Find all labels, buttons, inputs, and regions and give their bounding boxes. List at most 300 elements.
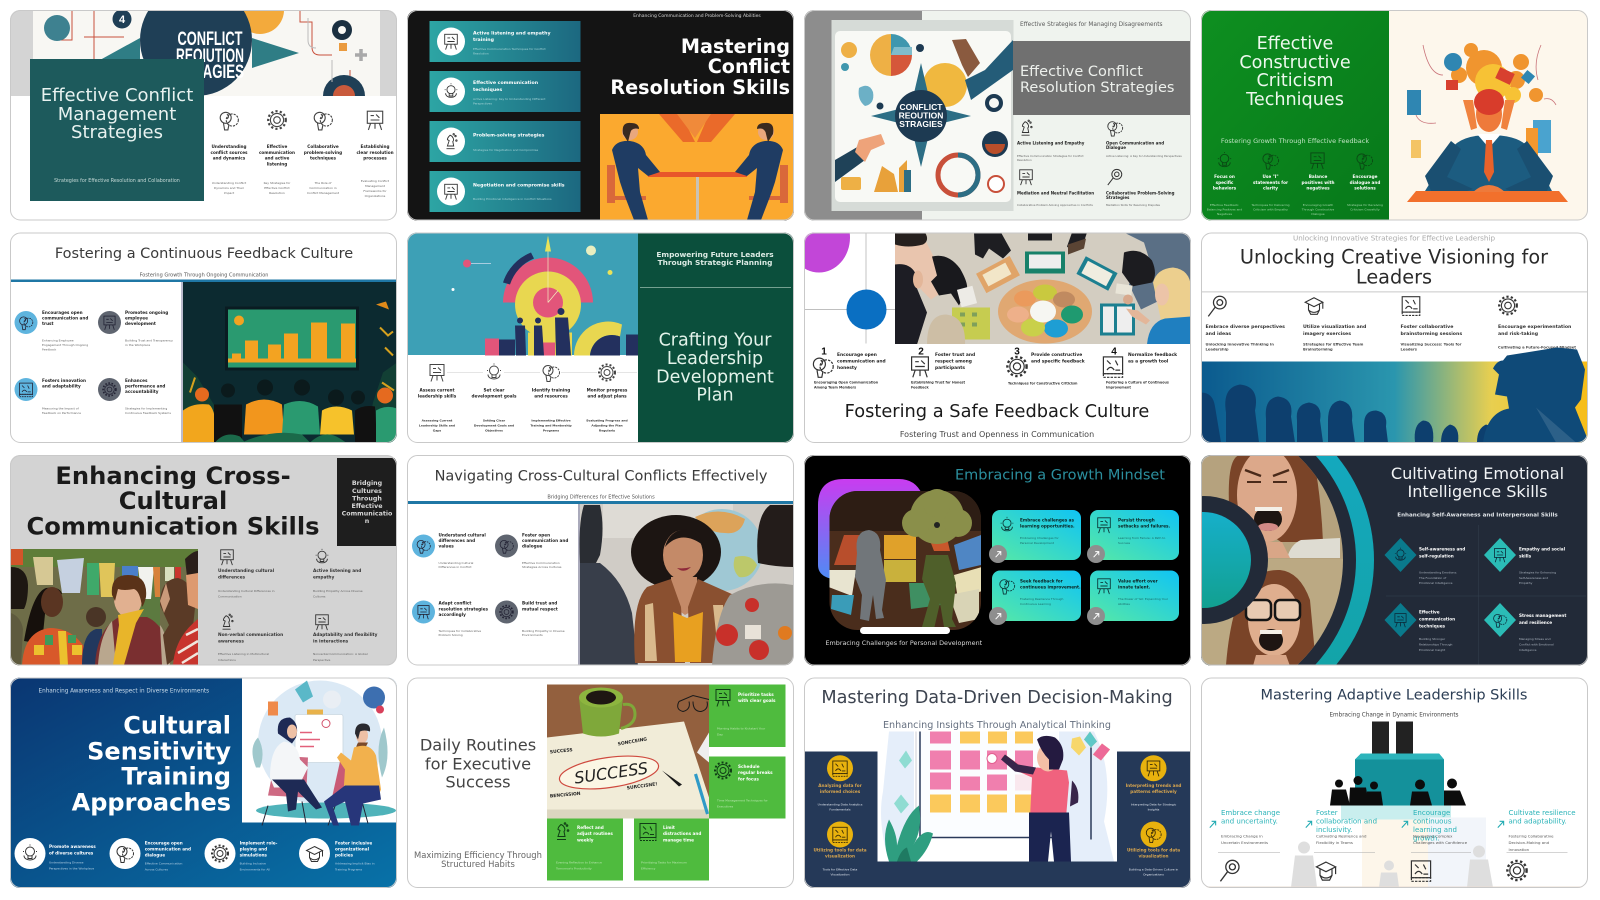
four approaches: Understand cultural — [438, 532, 486, 538]
panel: Fostering a Safe Feedback Culture — [804, 232, 1191, 443]
panel: Cultural Sensitivity Training Approaches: Approaches — [72, 788, 231, 816]
four leadership behaviours: and uncertainty. — [1221, 818, 1278, 826]
four skills with diamonds: Understanding Emotions: — [1419, 570, 1457, 574]
four skills with diamonds: Emotional Intelligence — [1419, 581, 1453, 585]
illustration: compass poster: STRAGIES — [899, 119, 943, 129]
four approaches: Building Empathy in Diverse — [522, 629, 565, 633]
panel: Effective Constructive Criticism Techniques — [1201, 10, 1588, 220]
four skills with diamonds: Managing Stress and — [1519, 637, 1551, 641]
four leadership behaviours: inclusivity. — [1316, 826, 1352, 834]
four development steps: Objectives — [485, 428, 503, 432]
illustration: audience watching bar chart — [181, 282, 397, 443]
panel: Cultural Sensitivity Training Approaches: Sensitivity — [87, 738, 231, 766]
four analytics items: visualization — [825, 854, 855, 858]
four analytics items: Visualization — [831, 872, 850, 876]
illustration: negotiation at a table — [600, 114, 794, 220]
four skills: Understanding cultural — [218, 568, 275, 574]
four approaches: playing and — [240, 846, 267, 852]
four techniques: negatives — [1306, 186, 1330, 190]
title panel: Effective Conflict — [41, 85, 193, 106]
photo: workshop from above — [895, 232, 1191, 344]
title panel: Development — [656, 368, 774, 388]
four analytics items: informed choices — [820, 789, 861, 794]
four techniques: Criticism with Empathy — [1253, 208, 1288, 212]
title: Cultivating Emotional — [1391, 464, 1564, 483]
four numbered items: 2 — [918, 346, 924, 358]
four skills with diamonds: Conflict with Emotional — [1519, 642, 1554, 646]
panel: Cultural Sensitivity Training Approaches — [10, 678, 397, 888]
four skills with diamonds: skills — [1519, 554, 1532, 558]
four teal skill panels — [430, 21, 580, 212]
four skills with diamonds: Empathy — [1519, 581, 1533, 585]
four skills with diamonds: Building Stronger — [1419, 637, 1446, 641]
illustration: conflict resolution poster — [10, 10, 397, 96]
four numbered items: 3 — [1014, 346, 1020, 358]
four skills: Interactions — [218, 658, 236, 662]
four numbered items: Foster trust and — [935, 352, 975, 358]
four techniques: Use "I" — [1262, 174, 1279, 179]
photo: success notebook and coffee: SUCCESS — [550, 747, 573, 755]
subtitle box: Bridging — [352, 480, 382, 487]
four benefits: Strategies for Implementing — [125, 406, 167, 410]
four practices: Brainstorming — [1303, 348, 1333, 352]
four strategies — [1017, 120, 1182, 207]
four benefits: and adaptability — [42, 384, 81, 388]
four approaches: resolution strategies — [438, 606, 488, 612]
four benefits — [14, 310, 173, 415]
four approaches: Techniques for Collaborative — [438, 629, 481, 633]
four strategies: Active Listening: A Key to Understanding Perspectives — [1106, 154, 1182, 158]
four gradient cards: learning opportunities. — [1020, 524, 1075, 528]
green routine tiles: Prioritizing Tasks for Maximum — [641, 860, 687, 864]
four approaches — [14, 838, 375, 872]
four skills with diamonds — [1384, 525, 1586, 665]
four benefits: Continuous Feedback Systems — [125, 411, 171, 415]
title: Conflict — [708, 55, 790, 78]
four approaches: mutual respect — [522, 606, 558, 612]
four approaches: communication and — [522, 538, 568, 543]
four teal skill panels: Building Emotional Intelligence in Conflict Situations — [473, 197, 552, 201]
illustration: conflict resolution poster: STRAGIES — [176, 62, 244, 83]
four practices: Leadership — [1206, 348, 1229, 352]
four benefits: development — [125, 321, 156, 326]
four skills: Communication — [218, 594, 242, 598]
four numbered items: Improvement — [1106, 386, 1131, 390]
four analytics items: Interpreting Data for Strategic — [1131, 802, 1177, 806]
four gradient cards: Learning from Failure: A Path to — [1118, 536, 1165, 540]
panel: Fostering a Safe Feedback Culture: Fostering Trust and Openness in Communication — [900, 430, 1094, 439]
illustration: two people with clipboard — [242, 678, 397, 826]
four numbered items: Provide constructive — [1031, 352, 1082, 358]
four benefits: accountability — [125, 389, 159, 394]
four strategy items: Collaborative — [307, 144, 339, 149]
title band — [1013, 41, 1191, 115]
panel: Daily Routines for Executive Success — [407, 678, 794, 888]
subtitle box: Communicatio — [342, 510, 393, 518]
four approaches: dialogue — [145, 852, 165, 858]
title panel: Leadership — [667, 349, 763, 369]
illustration: target with leaders — [407, 232, 638, 356]
four benefits: communication and — [42, 316, 88, 320]
four benefits: trust — [42, 321, 54, 326]
green routine tiles — [547, 684, 786, 880]
photo: young people at festival — [10, 549, 198, 666]
title: Mastering — [681, 35, 790, 58]
four development steps: Identify training — [532, 388, 570, 392]
four gradient cards: Success — [1118, 541, 1131, 545]
four approaches: policies — [335, 852, 354, 858]
green routine tiles: adjust routines — [577, 831, 613, 836]
four teal skill panels: Problem-solving strategies — [473, 132, 545, 138]
four benefits: employee — [125, 316, 148, 320]
four teal skill panels: Perspectives — [473, 102, 492, 106]
four analytics items: Understanding Data Analytics — [818, 802, 863, 806]
panel: Fostering a Continuous Feedback Culture — [10, 232, 397, 443]
four numbered items: and specific feedback — [1031, 358, 1085, 364]
four development steps: Assess current — [420, 388, 454, 392]
four development steps: Development Goals and — [474, 424, 514, 428]
photo: success notebook and coffee: SUCCESS — [573, 758, 649, 788]
four approaches: Environments for All — [240, 868, 270, 872]
title band: Effective Conflict — [1020, 64, 1143, 80]
four analytics items: Insights — [1148, 808, 1160, 812]
panel: Crafting Your Leadership Development Plan — [407, 232, 794, 443]
four approaches: Environments — [522, 633, 543, 637]
four benefits: performance and — [125, 384, 165, 388]
four numbered items — [813, 346, 1177, 390]
four approaches: Encourage open — [145, 840, 183, 846]
four approaches: Effective Communication — [145, 862, 182, 866]
four skills with diamonds: Self-Awareness and — [1519, 576, 1548, 580]
four gradient cards: Fostering Resilience Through — [1020, 597, 1063, 601]
photo: success notebook and coffee — [547, 684, 709, 818]
panel: Cultural Sensitivity Training Approaches: Enhancing Awareness and Respect in Diverse Environments — [38, 688, 209, 694]
panel: Effective Conflict Resolution Strategies — [804, 10, 1191, 220]
green routine tiles: regular breaks — [738, 770, 773, 775]
four skills with diamonds: The Foundation of — [1418, 576, 1447, 580]
four practices: and risk-taking — [1498, 331, 1538, 337]
four development steps: Training and Mentorship — [530, 424, 573, 428]
four strategy items: Understanding Conflict — [212, 181, 247, 185]
illustration: compass poster — [832, 20, 1014, 211]
panel: Daily Routines for Executive Success: Daily Routines — [420, 736, 536, 754]
four development steps: Leadership Skills and — [419, 424, 455, 428]
green routine tiles: weekly — [577, 838, 594, 842]
four techniques: solutions — [1354, 186, 1376, 190]
four practices: and ideas — [1206, 331, 1231, 337]
four numbered items: Encouraging Open Communication — [814, 380, 879, 384]
green routine tiles: Efficiency — [641, 866, 656, 870]
four numbered items: 1 — [821, 346, 827, 358]
four development steps: Evaluating Progress and — [586, 418, 628, 422]
four strategy items: Understanding — [212, 144, 246, 149]
green routine tiles: with clear goals — [738, 698, 776, 703]
panel: Mastering Adaptive Leadership Skills — [1201, 678, 1588, 888]
four skills with diamonds: Relationships Through — [1419, 642, 1452, 646]
title panel: Through Strategic Planning — [658, 258, 772, 267]
four numbered items: communication and — [837, 358, 886, 364]
four development steps: Gaps — [433, 428, 441, 432]
four skills with diamonds: techniques — [1419, 624, 1446, 628]
four approaches: Addressing Implicit Bias in — [335, 862, 375, 866]
four techniques: Criticism Gracefully — [1350, 208, 1380, 212]
four leadership behaviours: Challenges with Confidence — [1413, 840, 1468, 845]
photo: success notebook and coffee: BENCISSION — [550, 791, 581, 799]
panel: Navigating Cross-Cultural Conflicts Effectively: Navigating Cross-Cultural Conflicts Effectively — [435, 468, 768, 484]
four strategies: Resolution — [1017, 158, 1032, 162]
four skills with diamonds: Stress management — [1519, 613, 1566, 618]
panel: Daily Routines for Executive Success: Success — [445, 772, 511, 792]
four strategy items: Effective Conflict — [264, 186, 291, 190]
four benefits: Measuring the Impact of — [42, 406, 80, 410]
four skills: awareness — [218, 638, 244, 644]
four gradient cards: continuous improvement. — [1020, 584, 1081, 590]
four benefits: Feedback on Performance — [42, 411, 81, 415]
four strategy items: The Role of — [314, 181, 332, 185]
four strategy items: processes — [363, 156, 387, 160]
four teal skill panels: Active listening and empathy — [473, 30, 551, 36]
four techniques: Negatives — [1217, 212, 1232, 216]
green routine tiles: Schedule — [738, 764, 760, 769]
four techniques — [1207, 152, 1383, 216]
four development steps: Set clear — [484, 388, 505, 392]
four approaches: values — [438, 544, 454, 548]
four numbered items: Encourage open — [837, 352, 877, 358]
four strategy items: Communication in — [309, 186, 337, 190]
four strategies: Mediation and Neutral Facilitation — [1017, 190, 1094, 196]
four approaches: simulations — [240, 852, 267, 858]
four numbered items: Among Team Members — [814, 386, 856, 390]
four teal skill panels: Active Listening: Key to Understanding Different — [473, 97, 546, 101]
four skills: Perspective — [313, 658, 331, 662]
four gradient cards: Seek feedback for — [1020, 578, 1064, 584]
four techniques: Balancing Positives and — [1207, 208, 1242, 212]
four approaches: Understanding Diverse — [49, 860, 84, 864]
title panel — [638, 232, 794, 443]
four teal skill panels: Resolution — [473, 52, 489, 56]
four skills: empathy — [313, 574, 334, 580]
title panel: Strategies — [71, 122, 163, 143]
four strategy items: techniques — [310, 156, 337, 160]
illustration: conflict resolution poster: 4 — [119, 14, 126, 26]
four strategy items: conflict sources — [210, 150, 248, 155]
four leadership behaviours: Cultivate resilience — [1508, 809, 1576, 817]
green routine tiles: Evening Reflection to Enhance — [556, 860, 602, 864]
green routine tiles: Tomorrow's Productivity — [555, 866, 592, 870]
four strategy items: clear resolution — [356, 150, 394, 155]
four gradient cards: Abilities — [1118, 602, 1130, 606]
panel: Mastering Data-Driven Decision-Making: Mastering Data-Driven Decision-Making — [821, 688, 1173, 708]
four approaches: Across Cultures — [145, 868, 168, 872]
four strategy items: Effective — [267, 144, 287, 149]
four leadership behaviours: Innovation — [1508, 847, 1530, 852]
four gradient cards: Embracing Challenges for — [1020, 536, 1059, 540]
four leadership behaviours: and adaptability. — [1508, 818, 1567, 826]
four development steps: Implementing Effective — [531, 418, 571, 422]
four approaches: Foster inclusive — [335, 840, 372, 846]
four analytics items: Organizations — [1143, 872, 1164, 876]
four techniques: Encourage — [1353, 174, 1378, 179]
four strategy items: Management — [365, 184, 386, 188]
subtitle box: Effective — [352, 503, 382, 510]
panel: Fostering a Continuous Feedback Culture: Fostering a Continuous Feedback Culture — [55, 246, 353, 262]
four approaches: Implement role- — [240, 840, 278, 846]
four strategy items: Organizations — [365, 194, 386, 198]
four strategy items: Conflict Management — [307, 191, 340, 195]
four strategy items: Establishing — [361, 144, 389, 149]
four development steps: Assessing Current — [422, 418, 453, 422]
four approaches: communication and — [145, 846, 191, 852]
panel: Effective Conflict Resolution Strategies: Effective Strategies for Managing Disagreements — [1020, 22, 1163, 28]
title: Criticism — [1256, 71, 1334, 91]
four development steps: development goals — [472, 394, 517, 398]
four approaches: Promote awareness — [49, 844, 96, 849]
panel: Navigating Cross-Cultural Conflicts Effectively: Bridging Differences for Effective Solutions — [547, 494, 655, 500]
four strategy items: and dynamics — [213, 156, 246, 160]
panel: Mastering Adaptive Leadership Skills: Embracing Change in Dynamic Environments — [1329, 712, 1459, 718]
subtitle box: n — [365, 518, 369, 525]
four strategies: Active Listening and Empathy — [1017, 140, 1085, 146]
panel: Unlocking Creative Visioning for Leaders: Leaders — [1356, 266, 1432, 288]
four leadership behaviours: Embracing Change in — [1221, 834, 1263, 838]
four gradient cards: The Power of Yet: Expanding Your — [1117, 597, 1169, 601]
four leadership behaviours: Foster — [1316, 809, 1338, 817]
four development steps: Programs — [543, 428, 559, 432]
green routine tiles: Executives — [717, 804, 734, 808]
four skills with diamonds: Self-awareness and — [1419, 546, 1465, 552]
four leadership behaviours: Uncertain Environments — [1221, 840, 1268, 845]
decorative circles — [804, 232, 895, 344]
four benefits: Enhances — [125, 378, 148, 383]
four skills: Understanding Cultural Differences in — [218, 589, 275, 593]
four analytics items: visualization — [1139, 854, 1168, 858]
four numbered items: honesty — [837, 365, 857, 371]
four leadership behaviours: Encourage — [1413, 809, 1450, 817]
four numbered items: as a growth tool — [1128, 358, 1169, 364]
four development steps: leadership skills — [418, 394, 457, 398]
four techniques: positives with — [1301, 180, 1335, 185]
four skills: Adaptability and flexibility — [313, 632, 378, 638]
four skills: Non-verbal communication — [218, 632, 283, 638]
panel: Unlocking Creative Visioning for Leaders — [1201, 232, 1589, 444]
title panel: Crafting Your — [659, 330, 772, 350]
four approaches: Foster open — [522, 532, 550, 538]
four leadership behaviours: Embrace change — [1221, 809, 1280, 817]
subtitle box — [337, 458, 397, 546]
four skills: in interactions — [313, 638, 349, 644]
four development steps: Regularly — [599, 428, 615, 432]
photo: woman in conversation — [578, 504, 794, 666]
four teal skill panels: Effective communication — [473, 80, 538, 86]
four skills: Building Empathy Across Diverse — [313, 589, 363, 593]
four skills with diamonds: self-regulation — [1419, 554, 1454, 558]
four techniques: Balance — [1309, 174, 1327, 179]
four numbered items: Fostering a Culture of Continuous — [1106, 380, 1169, 384]
panel: Cultivating Emotional Intelligence Skills: Enhancing Self-Awareness and Interpersonal Skills — [1397, 512, 1558, 518]
four strategy items: listening — [267, 162, 287, 166]
four approaches: dialogue — [522, 544, 543, 548]
illustration: leader silhouettes — [1201, 348, 1589, 444]
panel: Effective Conflict Management Strategies — [10, 0, 397, 220]
subtitle box: Cultures — [352, 488, 382, 495]
four development steps: and resources — [534, 394, 568, 398]
four techniques: Encouraging Growth — [1303, 203, 1333, 207]
four practices: Foster collaborative — [1400, 324, 1453, 330]
four development steps: Adjusting the Plan — [591, 424, 623, 428]
four teal skill panels: Negotiation and compromise skills — [473, 182, 565, 188]
four leadership behaviours: collaboration and — [1316, 818, 1377, 826]
title panel: Management — [58, 104, 176, 125]
panel: Unlocking Creative Visioning for Leaders: Unlocking Innovative Strategies for Effective Leadership — [1293, 234, 1495, 242]
four practices: Unlocking Innovative Thinking in — [1206, 342, 1274, 346]
four benefits: Enhancing Employee — [42, 338, 74, 342]
four practices: Strategies for Effective Team — [1303, 342, 1364, 346]
title: Intelligence Skills — [1407, 482, 1548, 501]
title: Effective — [1257, 34, 1333, 54]
four strategy items: and active — [265, 156, 289, 160]
photo: success notebook and coffee: SONCCEING — [617, 736, 648, 747]
green routine tiles: Day — [717, 732, 723, 736]
panel: Mastering Adaptive Leadership Skills: Mastering Adaptive Leadership Skills — [1261, 688, 1527, 704]
green routine tiles: for focus — [738, 776, 759, 782]
green routine tiles: Limit — [663, 825, 675, 830]
four approaches: differences and — [438, 538, 475, 543]
four development steps — [418, 364, 637, 432]
panel: Unlocking Creative Visioning for Leaders: Unlocking Creative Visioning for — [1240, 246, 1548, 268]
four development steps: Monitor progress — [587, 388, 628, 392]
illustration: conflict resolution poster: CONFLICT — [178, 29, 243, 50]
four leadership behaviours: Fostering Collaborative — [1508, 834, 1554, 838]
four techniques: dialogue and — [1350, 180, 1380, 185]
four practices: Utilize visualization and — [1303, 324, 1366, 330]
panel: Navigating Cross-Cultural Conflicts Effectively — [407, 455, 794, 666]
photo: success notebook and coffee: SURCCISNE! — [626, 781, 658, 791]
four benefits: Engagement Through Ongoing — [42, 343, 88, 347]
four numbered items: Normalize feedback — [1128, 352, 1177, 358]
four benefits: Building Trust and Transparency — [125, 338, 173, 342]
subtitle box: Through — [352, 496, 382, 502]
four approaches: organizational — [335, 846, 370, 852]
four techniques: specific — [1216, 180, 1234, 185]
title: Constructive — [1239, 53, 1351, 73]
four strategies: Collaborative Problem-Solving Approaches in Conflicts — [1017, 203, 1093, 207]
four techniques: clarity — [1263, 186, 1278, 190]
four strategies: Effective Communication Strategies for Conflict — [1017, 154, 1084, 158]
title: Resolution Skills — [610, 76, 790, 99]
panel: Mastering Conflict Resolution Skills: Enhancing Communication and Problem-Solving Abilities — [633, 13, 761, 19]
four strategies: Open Communication and — [1106, 140, 1164, 146]
four approaches: Building Inclusive — [240, 862, 266, 866]
green routine tiles: Prioritize tasks — [738, 692, 774, 697]
green routine tiles: Time Management Techniques for — [716, 798, 769, 802]
four benefits: Encourages open — [42, 310, 83, 315]
four practices — [1206, 296, 1576, 352]
four approaches: Training Programs — [334, 868, 362, 872]
panel: Daily Routines for Executive Success: for Executive — [425, 754, 531, 774]
panel: Cultural Sensitivity Training Approaches: Cultural — [123, 712, 231, 740]
four gradient cards: Embrace challenges as — [1020, 518, 1074, 522]
four skills with diamonds: Emotional Insight — [1419, 648, 1446, 652]
four techniques: Dialogue — [1311, 212, 1325, 216]
panel: Enhancing Cross-Cultural Communication Skills — [10, 455, 397, 666]
panel: Embracing a Growth Mindset: Embracing a Growth Mindset — [955, 468, 1165, 484]
four techniques: Strategies for Receiving — [1347, 203, 1383, 207]
four strategy items: Dynamics and Their — [214, 186, 245, 190]
four teal skill panels: training — [473, 37, 494, 43]
four strategy items: Resolution — [269, 191, 285, 195]
four skills: Cultures — [313, 594, 326, 598]
title band: Resolution Strategies — [1020, 80, 1174, 96]
